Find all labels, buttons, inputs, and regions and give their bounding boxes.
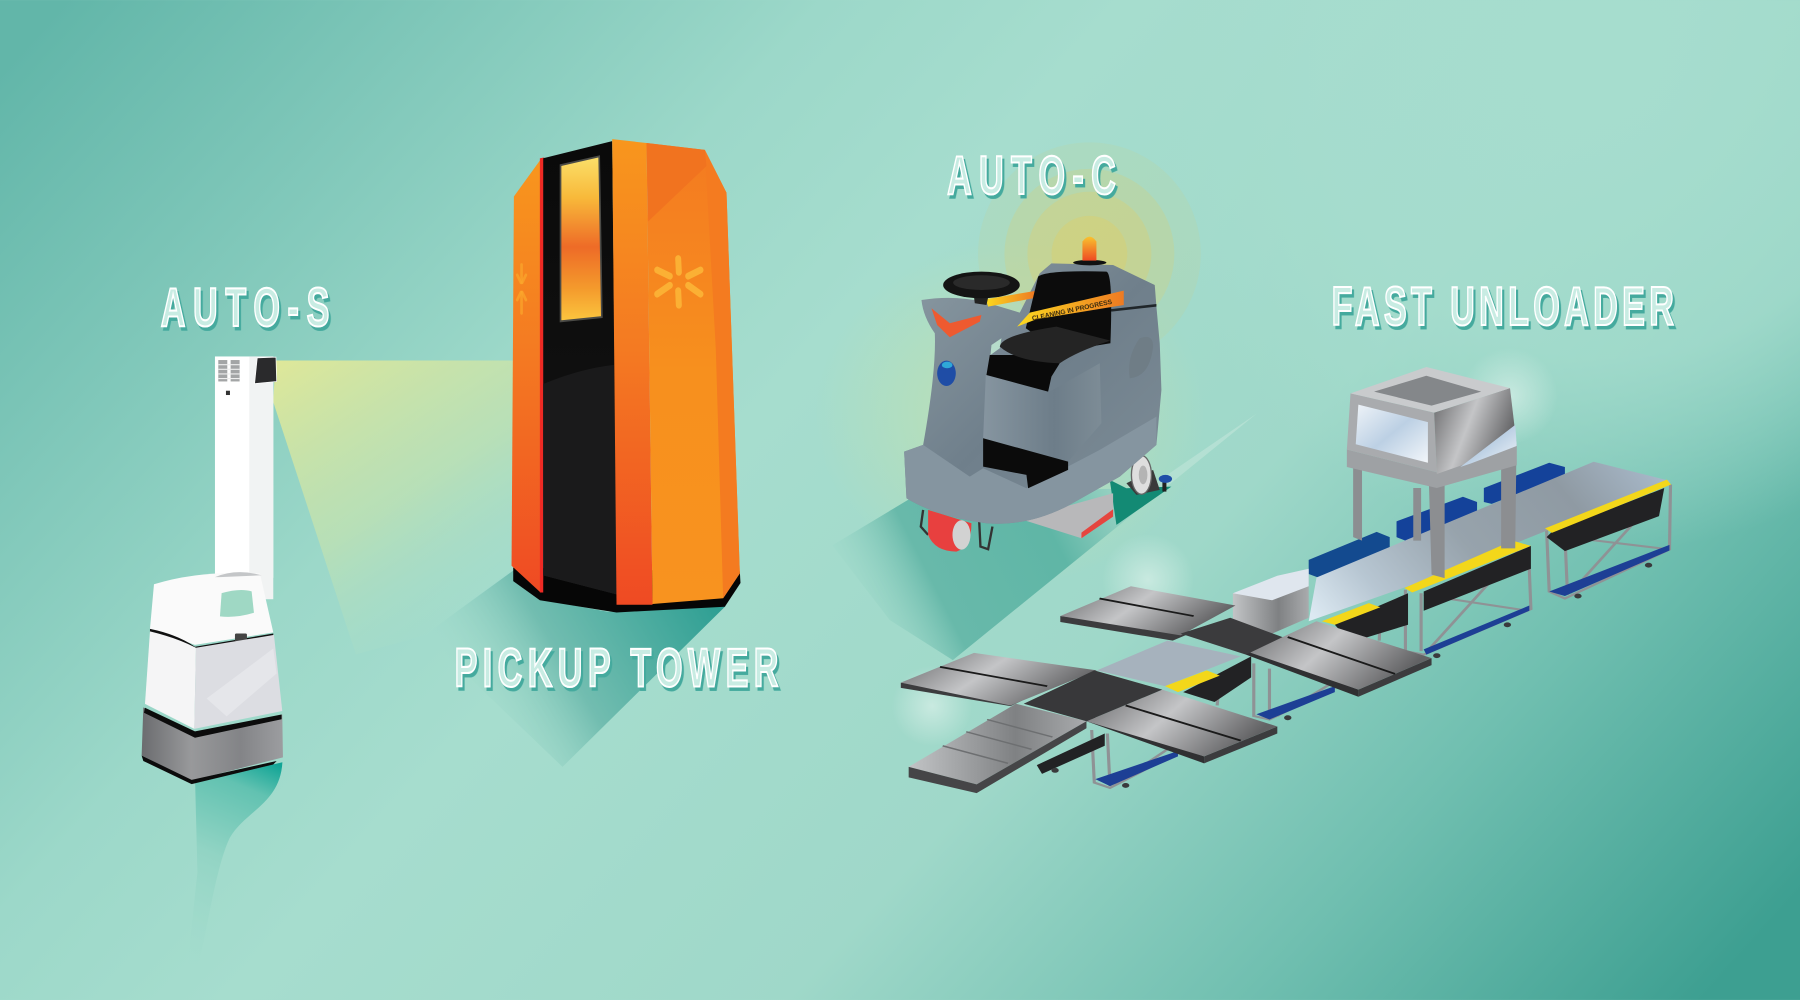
display window <box>561 156 602 321</box>
conveyor machine <box>901 367 1671 793</box>
label: FAST UNLOADER: FAST UNLOADER <box>1332 276 1674 337</box>
front wheel <box>921 510 992 552</box>
panel: Fast Unloader <box>892 348 1671 793</box>
support frames <box>1092 485 1671 788</box>
robot body <box>142 356 283 784</box>
spark logo large <box>657 259 701 305</box>
panel: Auto-S robot <box>142 356 513 1000</box>
dark under-belt housings <box>1037 488 1664 774</box>
front body panel <box>983 363 1101 462</box>
warm glow behind scrubber <box>815 241 1205 586</box>
spark logo small <box>517 265 526 313</box>
squeegee deck <box>1023 493 1113 538</box>
rear knob <box>1159 475 1172 492</box>
side recess <box>1129 337 1153 378</box>
tower body <box>512 139 740 612</box>
panel: Pickup Tower <box>425 139 740 767</box>
seat base <box>986 355 1060 392</box>
lower base <box>142 707 283 781</box>
scanner box <box>1347 367 1517 488</box>
head unit seam <box>1110 304 1156 312</box>
label: PICKUP TOWER: PICKUP TOWER <box>455 637 778 699</box>
beacon light <box>1073 237 1106 265</box>
floor shadow of tower <box>425 571 726 767</box>
middle housing left <box>145 631 196 729</box>
footstep <box>983 438 1068 488</box>
gap between column and seat <box>990 338 1001 355</box>
seat back <box>1026 271 1111 352</box>
teal floor patch <box>1110 480 1171 525</box>
label: AUTO-C: AUTO-C <box>947 145 1116 206</box>
left face <box>512 158 542 593</box>
caution tape: CLEANING IN PROGRESS <box>1031 299 1113 323</box>
black seam <box>150 629 273 648</box>
scanner light beam <box>273 361 513 654</box>
rear wheel <box>1126 456 1160 495</box>
center strip <box>612 139 653 605</box>
steering wheel <box>943 272 1020 305</box>
machine body <box>904 263 1161 524</box>
floor shadow of scrubber <box>832 413 1257 660</box>
seat cushion <box>1000 327 1110 363</box>
blue packages <box>1309 463 1565 577</box>
blue base rails <box>1095 545 1669 786</box>
chevron <box>931 308 981 337</box>
right face <box>647 143 740 604</box>
black front <box>543 141 617 594</box>
frame casters <box>1051 563 1652 788</box>
lower skirt shading <box>904 417 1156 524</box>
panel: Auto-C scrubber <box>815 142 1257 660</box>
silver box <box>1233 569 1309 634</box>
tape behind seat <box>986 291 1035 307</box>
upper housing <box>150 573 273 645</box>
scrubber machine <box>904 237 1172 552</box>
screen <box>220 590 254 617</box>
main belt <box>1309 462 1671 621</box>
caution tape <box>1017 291 1124 327</box>
lower cross conveyor <box>901 653 1277 793</box>
upper cross conveyor <box>1060 586 1432 697</box>
black base <box>513 568 740 612</box>
middle housing right <box>194 635 282 729</box>
white glows <box>892 348 1558 746</box>
beacon rings <box>978 142 1201 365</box>
yellow strips <box>1165 480 1671 692</box>
label: AUTO-S: AUTO-S <box>161 277 329 338</box>
blue sensor <box>937 361 956 386</box>
floor shadow of Auto-S <box>184 762 282 1000</box>
scanner legs <box>1353 463 1516 578</box>
mast <box>215 356 277 599</box>
silver transfer belt <box>1097 641 1241 686</box>
